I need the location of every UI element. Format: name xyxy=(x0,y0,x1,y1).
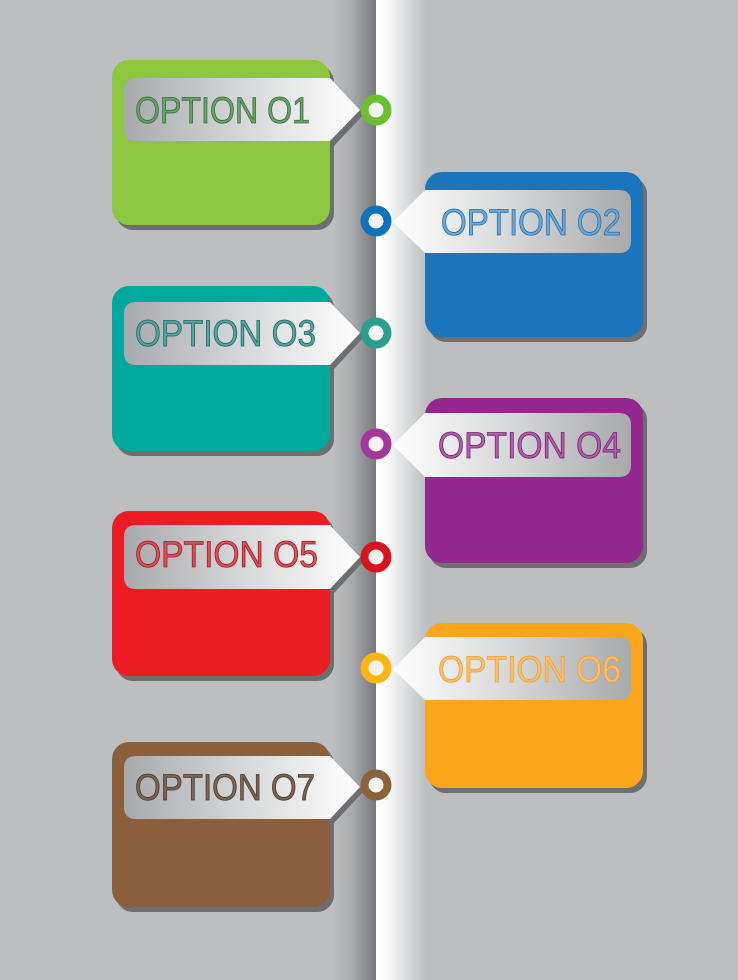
panel: option 05 xyxy=(112,511,392,681)
label tag: option 07 xyxy=(124,756,360,819)
label: OPTION 03: OPTION O3 xyxy=(135,313,316,354)
panel: option 06 xyxy=(360,623,647,793)
marker: option 05 xyxy=(360,542,392,572)
label tag: option 06 xyxy=(393,637,631,700)
marker: option 01 xyxy=(360,94,392,126)
panel: option 02 xyxy=(360,172,647,342)
label: OPTION 06: OPTION O6 xyxy=(438,649,621,690)
label tag: option 02 xyxy=(393,190,631,253)
central fold: shaded left side xyxy=(332,0,376,980)
marker: option 02 xyxy=(360,206,392,236)
label tag: option 04 xyxy=(393,413,631,477)
label tag: option 03 xyxy=(124,302,360,365)
marker: option 07 xyxy=(360,770,392,800)
marker: option 04 xyxy=(360,428,392,460)
panel: option 03 xyxy=(112,286,392,456)
panel: option 04 xyxy=(360,398,647,568)
label: OPTION 01: OPTION O1 xyxy=(135,90,310,131)
marker: option 06 xyxy=(360,652,392,684)
central fold: white band xyxy=(376,0,426,980)
marker: option 03 xyxy=(360,318,392,348)
panel: option 01 xyxy=(112,60,392,230)
label: OPTION 05: OPTION O5 xyxy=(135,534,318,575)
label: OPTION 07: OPTION O7 xyxy=(135,767,315,808)
label tag: option 01 xyxy=(124,78,360,141)
label: OPTION 02: OPTION O2 xyxy=(441,202,621,243)
label tag: option 05 xyxy=(124,525,360,589)
panel: option 07 xyxy=(112,742,392,912)
label: OPTION 04: OPTION O4 xyxy=(438,425,621,466)
